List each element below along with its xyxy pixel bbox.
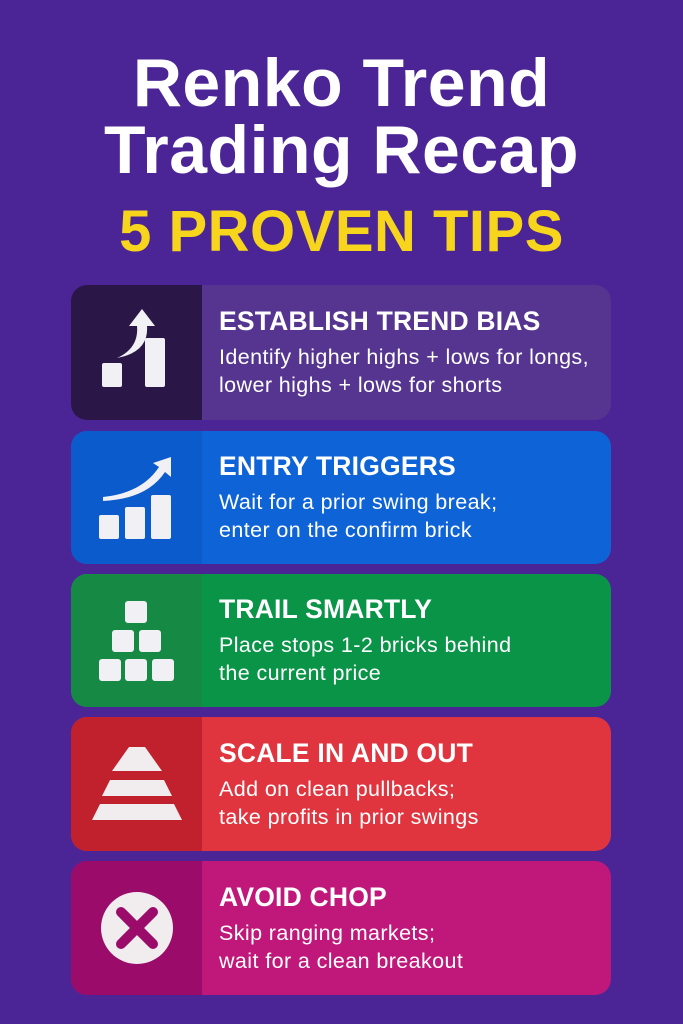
title: Trading Recap — [104, 112, 579, 188]
panel: entry triggers: ENTRY TRIGGERS — [219, 451, 456, 481]
icon: x circle — [71, 861, 202, 995]
icon: layered pyramid — [71, 717, 202, 851]
panel: scale in and out: SCALE IN AND OUT — [219, 738, 473, 768]
panel: scale in and out: take profits in prior swings — [219, 804, 479, 828]
icon: rising bars — [71, 431, 202, 564]
panel: establish trend bias: ESTABLISH TREND BIAS — [219, 306, 541, 336]
icon: brick pyramid — [71, 574, 202, 707]
panel: entry triggers: Wait for a prior swing break; — [219, 490, 497, 514]
panel: trail smartly: Place stops 1-2 bricks behind — [219, 633, 511, 657]
panel: establish trend bias: Identify higher highs + lows for longs, — [219, 345, 589, 369]
title — [104, 45, 579, 188]
panel: avoid chop: wait for a clean breakout — [219, 948, 463, 972]
panel: trail smartly: TRAIL SMARTLY — [219, 594, 432, 624]
panel: avoid chop: AVOID CHOP — [219, 882, 387, 912]
panel: scale in and out — [71, 717, 611, 851]
panel: establish trend bias: lower highs + lows for shorts — [219, 373, 502, 397]
title: Renko Trend — [133, 45, 550, 121]
icon: bars with arrow — [71, 285, 202, 420]
panel: entry triggers: enter on the confirm brick — [219, 518, 472, 542]
panel: establish trend bias — [71, 285, 611, 420]
panel: entry triggers — [71, 431, 611, 564]
panel: trail smartly: the current price — [219, 661, 381, 685]
panel: scale in and out: Add on clean pullbacks; — [219, 776, 455, 800]
subtitle: 5 PROVEN TIPS — [119, 199, 564, 264]
panel: trail smartly — [71, 574, 611, 707]
panel: avoid chop — [71, 861, 611, 995]
panel: avoid chop: Skip ranging markets; — [219, 920, 435, 944]
